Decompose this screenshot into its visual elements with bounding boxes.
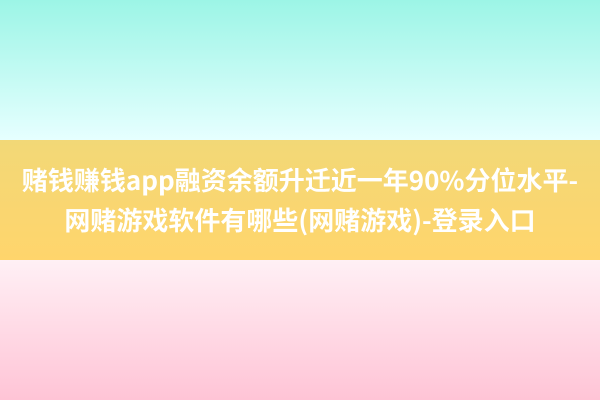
title: [22, 161, 578, 238]
title: 网赌游戏软件有哪些(网赌游戏)-登录入口: [64, 201, 536, 238]
banner band: [0, 140, 600, 260]
title: 赌钱赚钱app融资余额升迁近一年90%分位水平-: [22, 161, 578, 198]
